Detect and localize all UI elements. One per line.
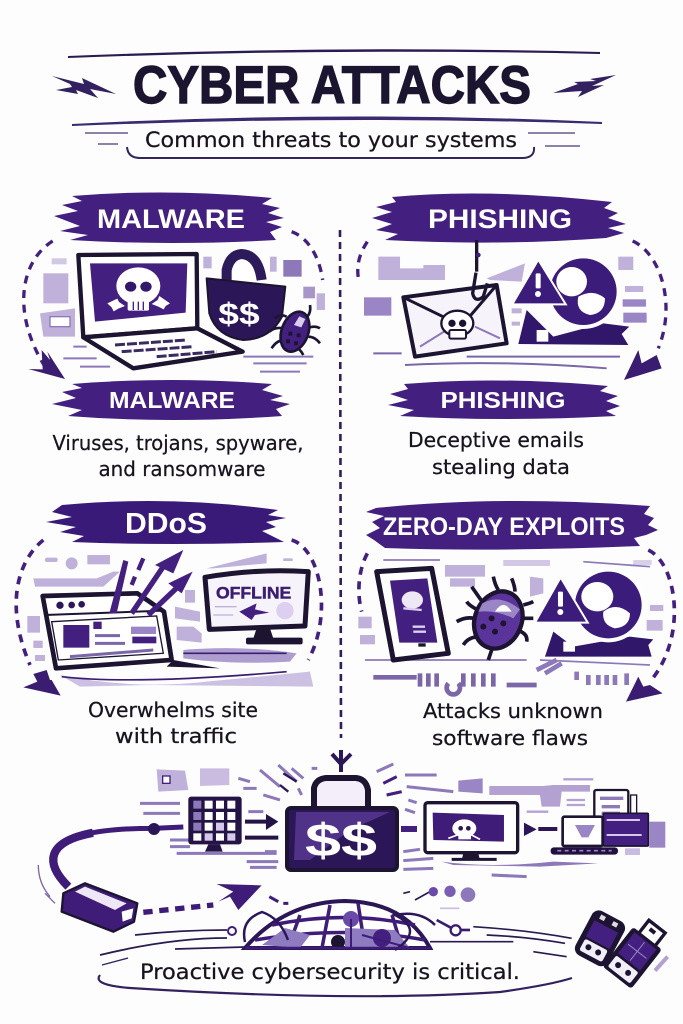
arrow: dashed right loop <box>358 241 666 348</box>
illustration: ddos browser, traffic arrows and offline monitor: OFFLINE <box>216 583 291 602</box>
text: ddos description: Overwhelms site <box>88 698 258 722</box>
illustration: phishing envelope, warning and shield <box>358 240 666 380</box>
banner: phishing heading: PHISHING <box>428 204 572 234</box>
arrow: dashed left loop <box>24 232 323 367</box>
text: zero-day description: Attacks unknown <box>423 699 603 723</box>
banner: ddos heading: DDoS <box>125 508 207 540</box>
banner: zero-day heading: ZERO-DAY EXPLOITS <box>383 513 625 541</box>
panel: ddos <box>16 501 321 748</box>
conclusion banner <box>99 930 572 996</box>
conclusion banner: Proactive cybersecurity is critical. <box>140 960 520 984</box>
text: phishing description: Deceptive emails <box>408 428 584 452</box>
text: malware description: and ransomware <box>98 457 266 481</box>
illustration: left chain with cable, server box and grid monitor <box>38 765 317 932</box>
text: malware description <box>52 431 304 481</box>
subtitle: Common threats to your systems <box>145 128 517 152</box>
arrow: dashed left loop <box>16 540 321 665</box>
text: ddos description: with traffic <box>115 724 237 748</box>
banner: ddos heading <box>46 501 286 544</box>
banner: phishing label: PHISHING <box>440 387 566 413</box>
text: ddos description <box>88 698 258 748</box>
text: zero-day description: software flaws <box>432 726 588 750</box>
banner: zero-day heading <box>366 501 658 550</box>
illustration: two usb drives <box>572 908 671 989</box>
banner: phishing label <box>388 380 620 419</box>
icon: right lightning bolt <box>553 75 616 97</box>
panel: attack chain and conclusion <box>38 750 671 996</box>
banner: phishing heading <box>372 193 626 243</box>
icon: left lightning bolt <box>52 76 116 98</box>
banner: malware heading: MALWARE <box>97 204 245 234</box>
illustration: ransom lock with antenna <box>287 750 397 870</box>
text: zero-day description <box>423 699 603 750</box>
text: phishing description <box>408 428 584 479</box>
illustration: malware laptop, ransom lock and bug: $$ <box>218 297 260 331</box>
arrow: dashed arrow to globe <box>143 884 288 912</box>
panel: zero-day exploits <box>358 501 674 750</box>
illustration: right chain with monitor and devices <box>377 764 671 989</box>
banner: malware label <box>52 380 290 420</box>
illustration: ddos browser, traffic arrows and offline monitor <box>16 540 321 696</box>
illustration: zero-day tablet, bug, warning and shield <box>358 550 674 702</box>
banner: malware label: MALWARE <box>109 387 235 413</box>
illustration: malware laptop, ransom lock and bug <box>24 232 325 379</box>
text: phishing description: stealing data <box>432 455 570 479</box>
vertical dashed divider <box>340 230 341 738</box>
illustration: ransom lock with antenna: $$ <box>305 814 377 866</box>
arrow: dashed right loop <box>359 550 674 682</box>
title: Cyber Attacks: CYBER ATTACKS <box>133 56 531 115</box>
panel: phishing <box>358 193 666 479</box>
panel: malware <box>24 192 325 481</box>
banner: malware heading <box>54 192 284 243</box>
title block <box>68 49 602 126</box>
subtitle <box>85 128 580 158</box>
illustration: globe <box>228 901 435 950</box>
text: malware description: Viruses, trojans, spyware, <box>52 431 304 455</box>
